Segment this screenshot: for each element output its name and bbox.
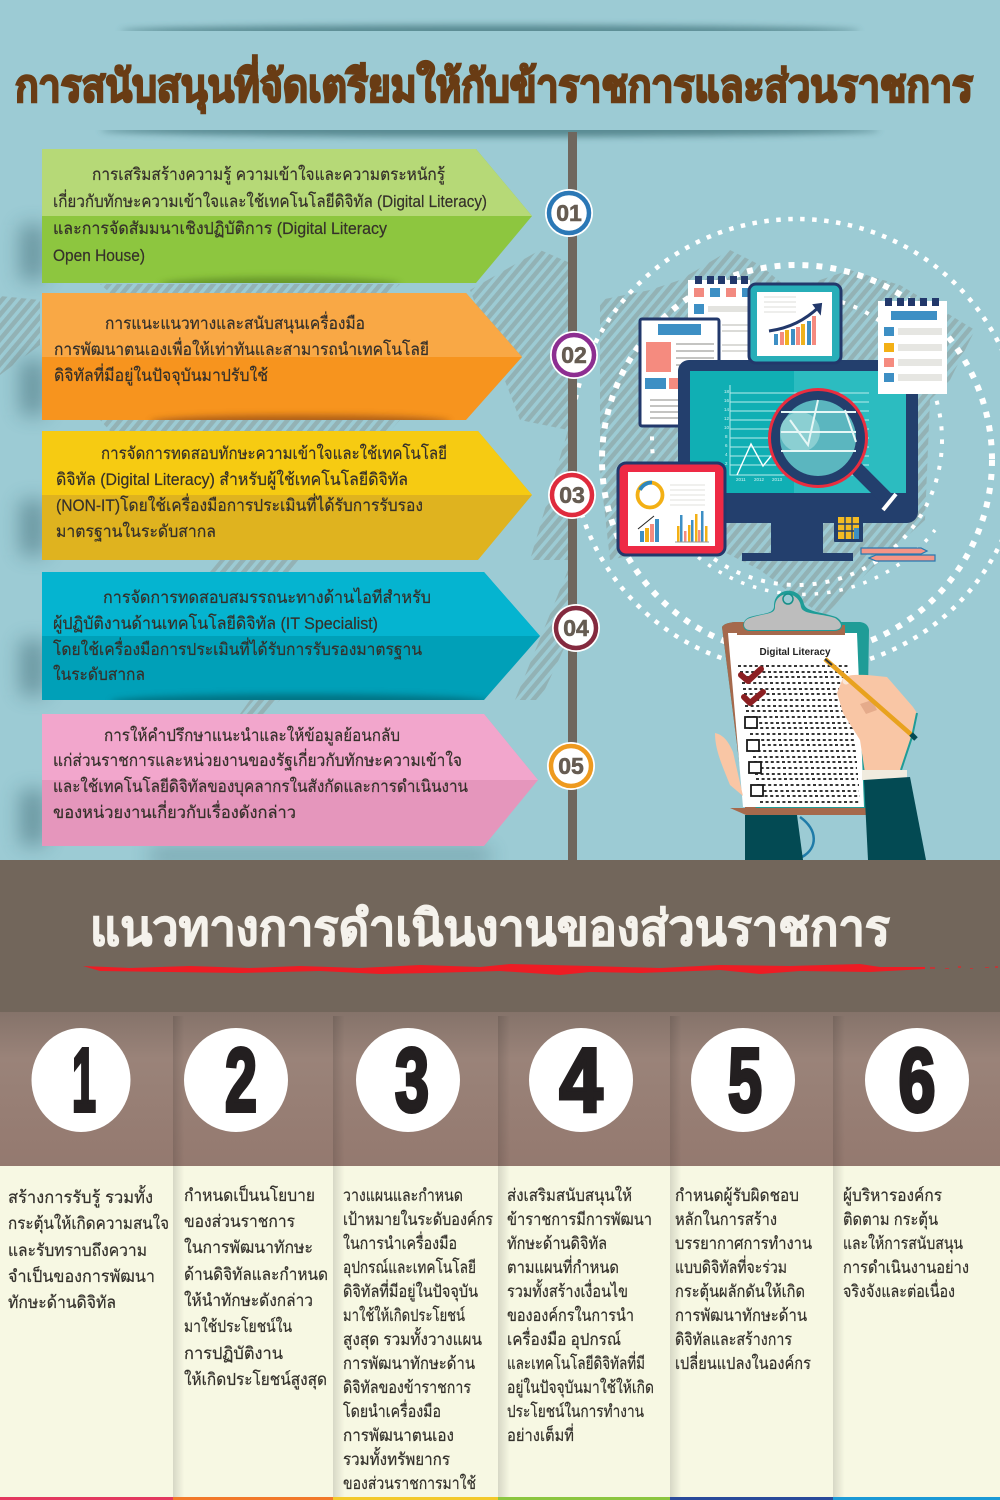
step 4 text: อยู่ในปัจจุบันมาใช้ให้เกิด (507, 1377, 654, 1398)
step 2 text: ในการพัฒนาทักษะ (184, 1237, 313, 1257)
chart axis labels: 12 (724, 416, 730, 421)
arrow 01 text: การเสริมสร้างความรู้ ความเข้าใจและความตระหนักรู้ (92, 164, 445, 185)
step 6 text (843, 1186, 969, 1301)
step 6 text: ติดตาม กระตุ้น (843, 1210, 938, 1230)
dotted rings (571, 219, 1000, 671)
arrow 05 text: การให้คำปรึกษาแนะนำและให้ข้อมูลย้อนกลับ (104, 725, 400, 746)
step 4 text: ทักษะด้านดิจิทัล (507, 1234, 607, 1253)
step 4 text: ประโยชน์ในการทำงาน (507, 1401, 644, 1421)
panel: arrow 05 (42, 714, 538, 846)
number badge 02: 02 (561, 342, 587, 368)
chart axis labels: 8 (725, 434, 728, 439)
step 1 text: กระตุ้นให้เกิดความสนใจ (8, 1213, 169, 1234)
left hand and sleeve (715, 733, 814, 860)
arrow 03 text: ดิจิทัล (Digital Literacy) สำหรับผู้ใช้เทคโนโลยีดิจิทัล (56, 469, 408, 490)
step 5 text (675, 1186, 812, 1373)
step 5: 5 (728, 1031, 762, 1131)
step 4 text: ขององค์กรในการนำ (507, 1305, 634, 1325)
red tablet with charts (618, 463, 725, 555)
calculator (834, 515, 863, 542)
step 4 (507, 1028, 654, 1445)
arrow 03 text: มาตรฐานในระดับสากล (56, 521, 216, 542)
arrow 05 text: ของหน่วยงานเกี่ยวกับเรื่องดังกล่าว (53, 800, 296, 822)
step 3 text: วางแผนและกำหนด (343, 1186, 463, 1205)
step 1 text: ทักษะด้านดิจิทัล (8, 1293, 116, 1312)
arrow shadows (20, 225, 490, 862)
chart axis labels (724, 389, 783, 482)
step 6 text: จริงจังและต่อเนื่อง (843, 1279, 955, 1301)
step 4 text: รวมทั้งสร้างเงื่อนไข (507, 1279, 628, 1301)
step 4 text: ตามแผนที่กำหนด (507, 1255, 619, 1277)
checklist dotted rows (738, 666, 860, 802)
step 6 text: และให้การสนับสนุน (843, 1233, 963, 1254)
arrow 04 text: การจัดการทดสอบสมรรถนะทางด้านไอทีสำหรับ (103, 587, 431, 607)
colored bottom stripe (0, 1497, 1000, 1500)
step 2 text: ของส่วนราชการ (184, 1212, 295, 1231)
step 2 text: การปฏิบัติงาน (184, 1344, 283, 1363)
step 4 text: อย่างเต็มที่ (507, 1423, 574, 1445)
chart axis labels: 14 (724, 407, 730, 412)
step 5 text: หลักในการสร้าง (675, 1209, 777, 1229)
chart axis labels: 2012 (754, 477, 765, 482)
number badge 05 (547, 742, 595, 790)
timeline spine (568, 132, 577, 860)
checklist heading: Digital Literacy (760, 647, 831, 658)
step 1 text: สร้างการรับรู้ รวมทั้ง (8, 1185, 153, 1208)
step 5 text: เปลี่ยนแปลงในองค์กร (675, 1351, 811, 1373)
step 2 text (184, 1184, 328, 1390)
arrow 04 text (53, 587, 431, 684)
step 5 text: ดิจิทัลและสร้างการ (675, 1330, 792, 1349)
step 3 text: การพัฒนาตนเอง (343, 1426, 454, 1445)
step 3 text: ดิจิทัลของข้าราชการ (343, 1378, 471, 1397)
arrow 03 text: (NON-IT)โดยใช้เครื่องมือการประเมินที่ได้รับการรับรอง (56, 493, 423, 515)
step 3 text (343, 1186, 493, 1493)
arrow 02 text (54, 311, 429, 386)
writing hand (825, 659, 917, 780)
magnifying glass (768, 388, 896, 510)
number badge 04: 04 (563, 615, 589, 641)
step 1 text: และรับทราบถึงความ (8, 1241, 147, 1260)
chart axis labels: 2011 (736, 477, 746, 482)
clipboard (722, 591, 869, 815)
red check marks (741, 669, 763, 703)
arrow 01 text (53, 164, 487, 265)
red brush underline (83, 964, 998, 975)
step 1 text (8, 1185, 169, 1312)
arrow 03 text (56, 443, 447, 542)
step 2 text: ด้านดิจิทัลและกำหนด (184, 1265, 328, 1284)
step 4: 4 (560, 1031, 602, 1131)
chart axis labels: 18 (724, 389, 730, 394)
arrow 01 text: เกี่ยวกับทักษะความเข้าใจและใช้เทคโนโลยีดิจิทัล (Digital Literacy) (53, 189, 487, 211)
illustration: computer and reports (618, 276, 947, 561)
step 3 text: เป้าหมายในระดับองค์กร (343, 1209, 493, 1229)
step 2: 2 (225, 1031, 257, 1131)
right report sheet (878, 298, 947, 394)
panel: section heading band (0, 860, 1000, 1012)
step 2 text: ให้นำทักษะดังกล่าว (184, 1290, 313, 1310)
arrow 04 text: ในระดับสากล (53, 664, 145, 684)
chart axis labels: 4 (725, 452, 728, 457)
step 5 text: บรรยากาศการทำงาน (675, 1234, 812, 1253)
arrow 02 text: การพัฒนาตนเองเพื่อให้เท่าทันและสามารถนำเทคโนโลยี (54, 337, 429, 359)
arrow 05 text: แก่ส่วนราชการและหน่วยงานของรัฐเกี่ยวกับทักษะความเข้าใจ (53, 748, 462, 771)
panel: step column headers (0, 1012, 1000, 1497)
step 2 text: ให้เกิดประโยชน์สูงสุด (184, 1369, 327, 1390)
right sleeve (864, 777, 926, 860)
step 2 (184, 1028, 328, 1390)
teal tablet with rising chart (749, 284, 841, 363)
step 4 text (507, 1185, 654, 1445)
step 3: 3 (395, 1031, 429, 1131)
map hatch texture (0, 250, 975, 730)
number badge 02 (550, 331, 598, 379)
pencils (861, 548, 935, 561)
step 3 text: การพัฒนาทักษะด้าน (343, 1354, 475, 1373)
step 3 text: สูงสุด รวมทั้งวางแผน (343, 1327, 482, 1350)
arrow 03 text: การจัดการทดสอบทักษะความเข้าใจและใช้เทคโนโลยี (101, 443, 447, 463)
step 3 text: ในการนำเครื่องมือ (343, 1231, 457, 1253)
step 1 (8, 1028, 169, 1312)
step 3 text: มาใช้ให้เกิดประโยชน์ (343, 1305, 465, 1325)
chart axis labels: 2 (725, 461, 728, 466)
step 3 text: รวมทั้งทรัพยากร (343, 1447, 450, 1469)
panel: arrow 04 (42, 572, 540, 710)
step 3 text: อุปกรณ์และเทคโนโลยี (343, 1257, 476, 1278)
arrow 05 text (53, 725, 468, 822)
step 6 text: ผู้บริหารองค์กร (843, 1186, 942, 1206)
step 2 text: มาใช้ประโยชน์ใน (184, 1316, 292, 1336)
arrow 01 text: และการจัดสัมมนาเชิงปฏิบัติการ (Digital Literacy (53, 219, 387, 238)
arrow 01 text: Open House) (53, 246, 145, 265)
step 5 (675, 1028, 812, 1373)
step 5 text: กำหนดผู้รับผิดชอบ (675, 1186, 799, 1206)
step 4 text: ส่งเสริมสนับสนุนให้ (507, 1185, 632, 1206)
number badge 03 (548, 471, 596, 519)
chart axis labels: 10 (724, 425, 730, 430)
panel: arrow 02 (42, 293, 522, 429)
number badge 05: 05 (558, 753, 584, 779)
arrow 04 text: โดยใช้เครื่องมือการประเมินที่ได้รับการรับรองมาตรฐาน (53, 637, 422, 660)
chart axis labels: 16 (724, 398, 730, 403)
number badge 01 (545, 189, 593, 237)
illustration: clipboard and hand (715, 591, 926, 860)
arrow 02 text: ดิจิทัลที่มีอยู่ในปัจจุบันมาปรับใช้ (54, 363, 268, 386)
step 5 text: กระตุ้นผลักดันให้เกิด (675, 1281, 805, 1302)
step 4 text: และเทคโนโลยีดิจิทัลที่มี (507, 1351, 645, 1373)
step 5 text: แบบดิจิทัลที่จะร่วม (675, 1255, 787, 1277)
step 3 text: ของส่วนราชการมาใช้ (343, 1473, 476, 1493)
arrow 02 text: การแนะแนวทางและสนับสนุนเครื่องมือ (105, 311, 365, 334)
arrow 05 text: และใช้เทคโนโลยีดิจิทัลของบุคลากรในสังกัดและการดำเนินงาน (53, 776, 468, 797)
step 2 text: กำหนดเป็นนโยบาย (184, 1184, 315, 1205)
section heading: แนวทางการดำเนินงานของส่วนราชการ (90, 902, 890, 956)
chart axis labels: 6 (725, 443, 728, 448)
checklist boxes (745, 717, 763, 796)
step 6 (843, 1028, 969, 1301)
panel: arrow 01 (42, 149, 532, 293)
step 1 text: จำเป็นของการพัฒนา (8, 1265, 155, 1286)
arrow 04 text: ผู้ปฏิบัติงานด้านเทคโนโลยีดิจิทัล (IT Specialist) (53, 613, 378, 634)
step 3 (343, 1028, 493, 1493)
number badge 03: 03 (559, 482, 585, 508)
step 5 text: การพัฒนาทักษะด้าน (675, 1306, 807, 1325)
left report sheet (640, 319, 719, 426)
step 6 text: การดำเนินงานอย่าง (843, 1258, 969, 1277)
lower title shadow band (102, 130, 878, 141)
number badge 04 (552, 604, 600, 652)
monitor (678, 360, 918, 561)
step 6: 6 (898, 1031, 936, 1131)
chart axis labels: 2013 (772, 477, 783, 482)
background (0, 0, 1000, 860)
top shadow band (122, 21, 858, 31)
step 3 text: ดิจิทัลที่มีอยู่ในปัจจุบัน (343, 1279, 478, 1302)
step 4 text: ข้าราชการมีการพัฒนา (507, 1210, 652, 1229)
step 1: 1 (72, 1031, 96, 1131)
back report sheet (688, 276, 750, 370)
panel: arrow 03 (42, 431, 532, 560)
number badge 01: 01 (556, 200, 582, 226)
column edge shadows (173, 1016, 1000, 1497)
step 4 text: เครื่องมือ อุปกรณ์ (507, 1327, 621, 1350)
step 3 text: โดยนำเครื่องมือ (343, 1399, 441, 1421)
